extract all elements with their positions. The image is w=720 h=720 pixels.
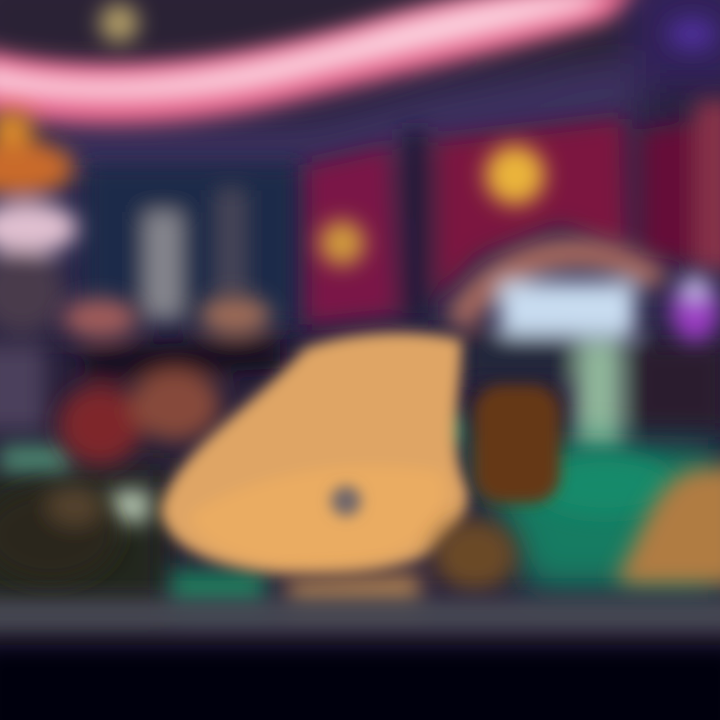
maroon panels bbox=[305, 100, 720, 325]
left side figure bbox=[0, 110, 78, 430]
green floor details bbox=[0, 414, 675, 608]
purple glow bbox=[671, 275, 719, 342]
large golden pastry bbox=[160, 333, 468, 575]
small pastry on right bbox=[615, 465, 720, 585]
pastry centre spot bbox=[331, 486, 361, 516]
ceiling light band core bbox=[0, 0, 610, 100]
top right purple glow bbox=[668, 18, 716, 50]
pastry lower edge bbox=[285, 519, 517, 608]
ceiling lamp bbox=[99, 3, 139, 43]
dark blue columns bbox=[85, 165, 300, 325]
black foreground bbox=[0, 645, 720, 720]
food items on left table bbox=[0, 295, 280, 583]
table edge strip bbox=[0, 600, 720, 630]
ceiling light band bbox=[0, 0, 640, 125]
stage arch and screen bbox=[445, 238, 720, 455]
brown drink bbox=[474, 385, 560, 503]
green floor bbox=[470, 440, 720, 590]
yellow wall lights bbox=[319, 145, 545, 266]
